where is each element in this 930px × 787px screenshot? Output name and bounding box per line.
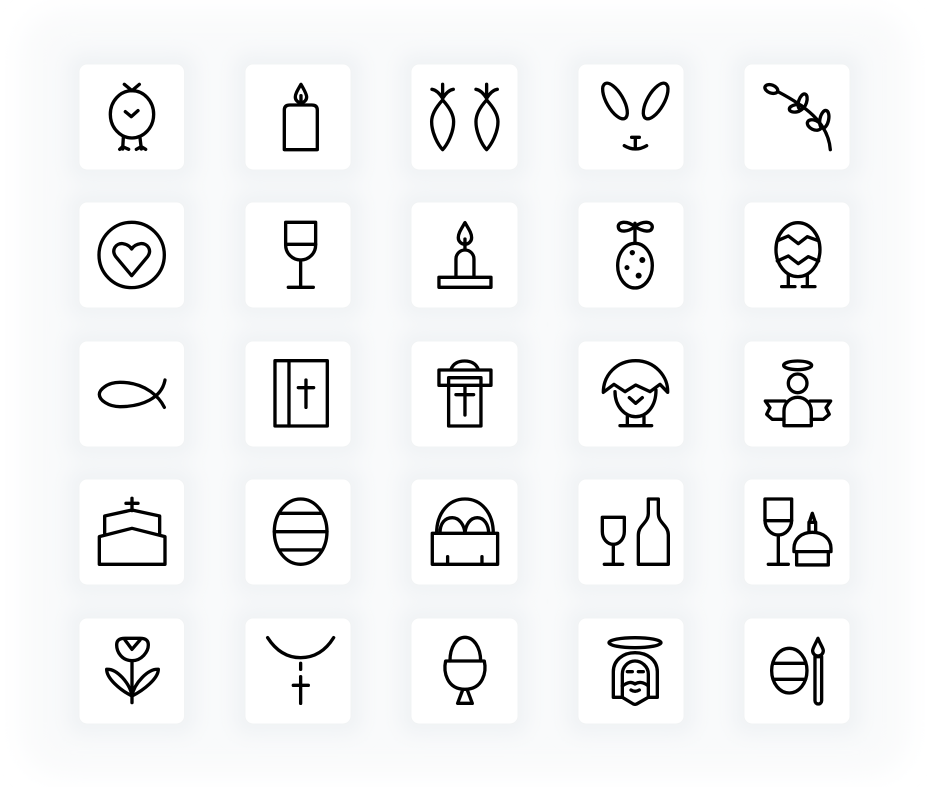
icon: bunny face xyxy=(598,80,673,149)
icon: heart in circle xyxy=(99,222,164,288)
card: rosary necklace xyxy=(245,618,351,724)
card: glass and Easter cake xyxy=(744,479,850,585)
card: cross tomb xyxy=(411,341,518,447)
icon: cross tomb xyxy=(439,361,491,426)
icon: chick xyxy=(110,84,154,149)
card: carrots xyxy=(411,64,518,170)
icon: wine glass xyxy=(286,222,316,287)
icon: striped egg xyxy=(274,499,327,564)
icon: fish xyxy=(99,380,165,407)
card: church xyxy=(79,479,184,585)
icon: hatching chick xyxy=(603,361,668,426)
icon: egg with legs xyxy=(776,223,820,287)
card: egg and paintbrush xyxy=(744,618,850,724)
icon: glass and Easter cake xyxy=(765,499,831,565)
card: bunny face xyxy=(578,64,684,170)
card: candle on stand xyxy=(411,202,518,308)
icon: egg with bow xyxy=(618,222,652,288)
card: egg with legs xyxy=(744,202,850,308)
icon: rosary necklace xyxy=(268,638,334,703)
card: glass and bottle xyxy=(578,479,684,585)
icon: candle on stand xyxy=(439,223,491,287)
card: fish xyxy=(79,341,184,447)
icon: tulip xyxy=(107,638,158,703)
icon: church xyxy=(99,498,165,564)
icon: willow branch xyxy=(764,83,830,150)
icon: carrots xyxy=(432,84,498,150)
card: egg with bow xyxy=(578,202,684,308)
card: egg cup xyxy=(411,618,518,724)
card shadows xyxy=(68,53,861,735)
icon: egg basket xyxy=(432,499,498,564)
icon: egg and paintbrush xyxy=(772,638,823,704)
card: heart in circle xyxy=(79,202,184,308)
card: chick xyxy=(79,64,184,170)
card: tulip xyxy=(79,618,184,724)
card: wine glass xyxy=(245,202,351,308)
icon: bible xyxy=(275,361,327,426)
icon: glass and bottle xyxy=(602,499,668,564)
card: angel xyxy=(744,341,850,447)
icon: angel xyxy=(765,361,831,426)
card: egg basket xyxy=(411,479,518,585)
card: striped egg xyxy=(245,479,351,585)
icon: egg cup xyxy=(445,637,485,703)
card: Jesus with halo xyxy=(578,618,684,724)
card: candle xyxy=(245,64,351,170)
icon: Jesus with halo xyxy=(609,638,661,704)
card: hatching chick xyxy=(578,341,684,447)
card: willow branch xyxy=(744,64,850,170)
icon: candle xyxy=(284,84,317,150)
card: bible xyxy=(245,341,351,447)
